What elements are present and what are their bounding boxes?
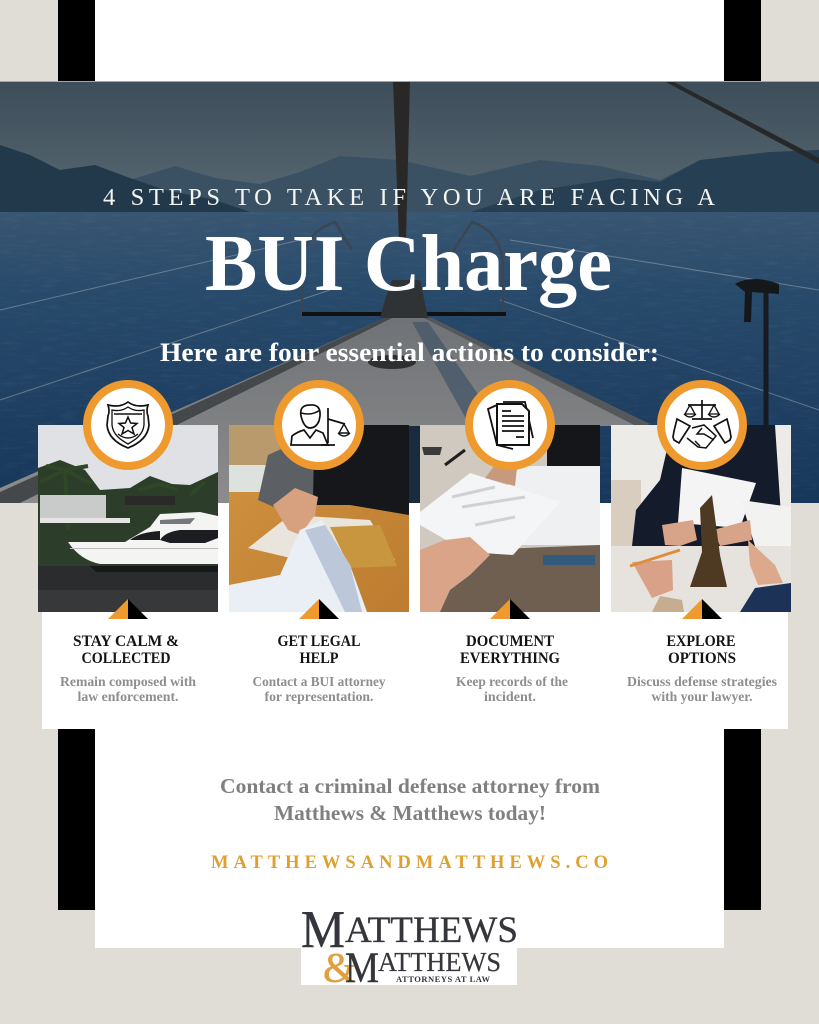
lower white panel xyxy=(95,503,724,948)
logo: & xyxy=(323,946,356,992)
step heading: EVERYTHING xyxy=(460,650,560,667)
step heading: EXPLORE xyxy=(666,633,736,650)
step heading: STAY CALM & xyxy=(73,633,179,650)
logo: ATTHEWS xyxy=(378,947,501,977)
photo: yacht at a dock xyxy=(38,425,218,612)
step heading: DOCUMENT xyxy=(466,633,555,650)
top white panel xyxy=(95,0,724,81)
step heading: COLLECTED xyxy=(82,650,170,667)
step description: Discuss defense strategies xyxy=(627,674,777,689)
step description: for representation. xyxy=(264,689,374,704)
step 4 xyxy=(627,384,777,704)
step description: law enforcement. xyxy=(78,689,178,704)
photo: documents handed across a desk xyxy=(420,425,600,612)
icon: stack of documents xyxy=(469,384,551,466)
triangle marker xyxy=(490,599,530,619)
step 1 xyxy=(60,384,196,704)
photo: handshake over a desk xyxy=(229,425,409,612)
intro sentence: Here are four essential actions to consider: xyxy=(160,338,659,367)
white backing for step cards xyxy=(42,612,788,729)
step 2 xyxy=(252,384,386,704)
logo xyxy=(301,901,518,992)
step 3 xyxy=(456,384,568,704)
triangle marker xyxy=(682,599,722,619)
step description: Keep records of the xyxy=(456,674,568,689)
top right black bar xyxy=(724,0,761,81)
top left black bar xyxy=(58,0,95,81)
step heading: HELP xyxy=(300,650,339,667)
logo: M xyxy=(345,945,379,992)
step heading: GET LEGAL xyxy=(278,633,360,650)
step description: Contact a BUI attorney xyxy=(252,674,386,689)
lower right black bar xyxy=(724,729,761,910)
triangle marker xyxy=(299,599,339,619)
logo: ATTHEWS xyxy=(345,910,518,951)
main title: BUI Charge xyxy=(205,220,612,308)
hero kicker heading: 4 STEPS TO TAKE IF YOU ARE FACING A xyxy=(103,184,715,211)
hero photo: boat bow on the sea xyxy=(0,81,819,503)
call to action text: Matthews & Matthews today! xyxy=(274,801,546,825)
step description: Remain composed with xyxy=(60,674,196,689)
call to action text: Contact a criminal defense attorney from xyxy=(220,774,600,798)
step heading: OPTIONS xyxy=(668,650,736,667)
logo: M xyxy=(301,901,345,959)
website address: MATTHEWSANDMATTHEWS.CO xyxy=(211,853,608,873)
triangle marker xyxy=(108,599,148,619)
icon: scales over a handshake xyxy=(661,384,743,466)
icon: police badge xyxy=(87,384,169,466)
icon: attorney with scales xyxy=(278,384,360,466)
lower left black bar xyxy=(58,729,95,910)
step description: with your lawyer. xyxy=(652,689,752,704)
step description: incident. xyxy=(484,689,536,704)
logo: ATTORNEYS AT LAW xyxy=(396,974,490,984)
photo: lawyer, client and justice statue xyxy=(611,425,791,612)
